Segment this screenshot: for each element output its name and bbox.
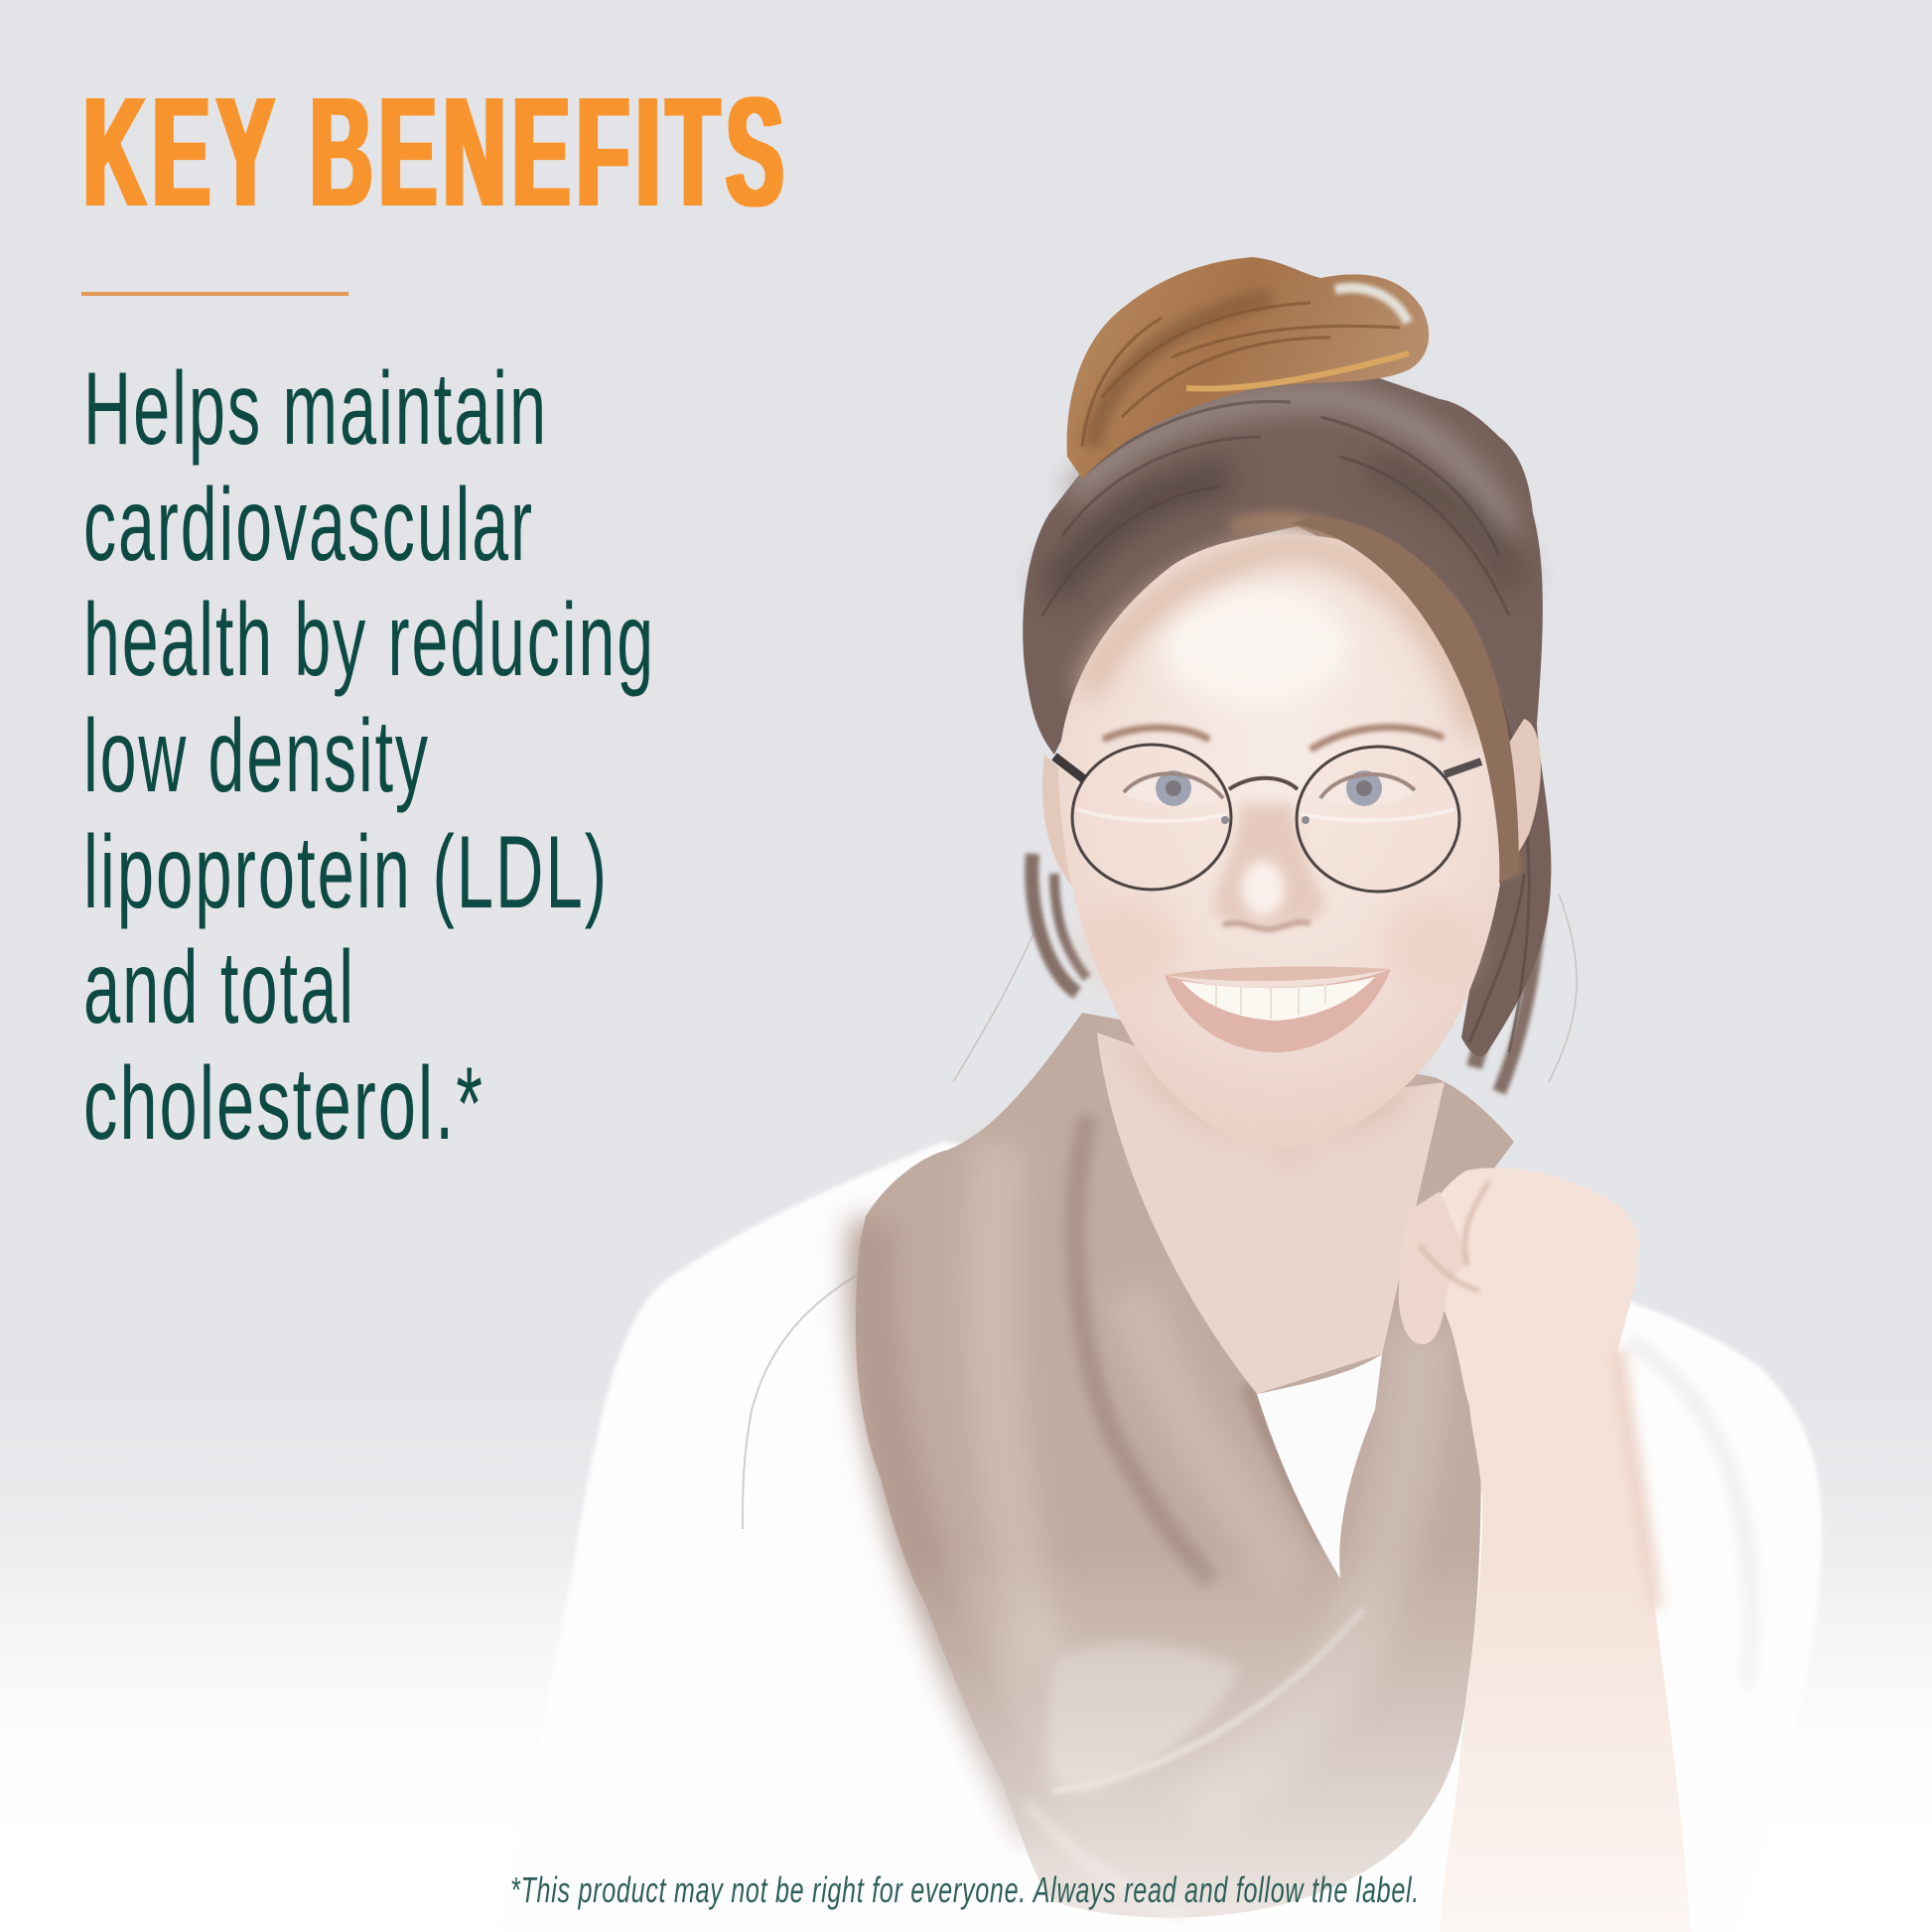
benefit text block: cholesterol.* [83,1046,484,1162]
title: KEY BENEFITS [83,65,790,238]
face [1058,535,1507,1147]
benefit text block: and total [83,930,355,1045]
benefit text block: lipoprotein (LDL) [83,815,609,930]
ears [1042,719,1541,890]
hair strands [1042,401,1529,1052]
footnote: *This product may not be right for everyone. Always read and follow the label. [510,1869,1420,1910]
benefit text block [83,351,655,1162]
benefit text block: health by reducing [83,583,655,698]
hairline shadow [1087,546,1479,735]
forearm and hand [1399,1168,1691,1932]
beige scarf [856,1013,1514,1918]
white shirt [496,1142,1822,1932]
nose [1213,804,1325,929]
hair mass [1023,347,1551,1056]
eyes [1124,770,1415,806]
bottom white fade [0,1549,1932,1932]
scarf folds [872,1116,1420,1837]
benefit text block: Helps maintain [83,351,548,467]
hair wisps behind the neck [953,854,1577,1092]
eyebrows [1103,728,1444,750]
fingers [1399,1191,1469,1344]
hair bun [1067,257,1429,479]
photo: smiling woman in glasses and scarf [496,257,1822,1932]
benefit text block: cardiovascular [83,468,534,583]
white tee [1257,1354,1382,1579]
round glasses [1054,745,1481,892]
benefit text block: low density [83,699,430,814]
orange divider rule [81,292,348,296]
smile [1165,967,1391,1052]
face strand of hair [1291,516,1519,884]
cheeks [1082,898,1181,988]
scarf inner loop [1048,1643,1239,1794]
neck [1097,1033,1445,1394]
